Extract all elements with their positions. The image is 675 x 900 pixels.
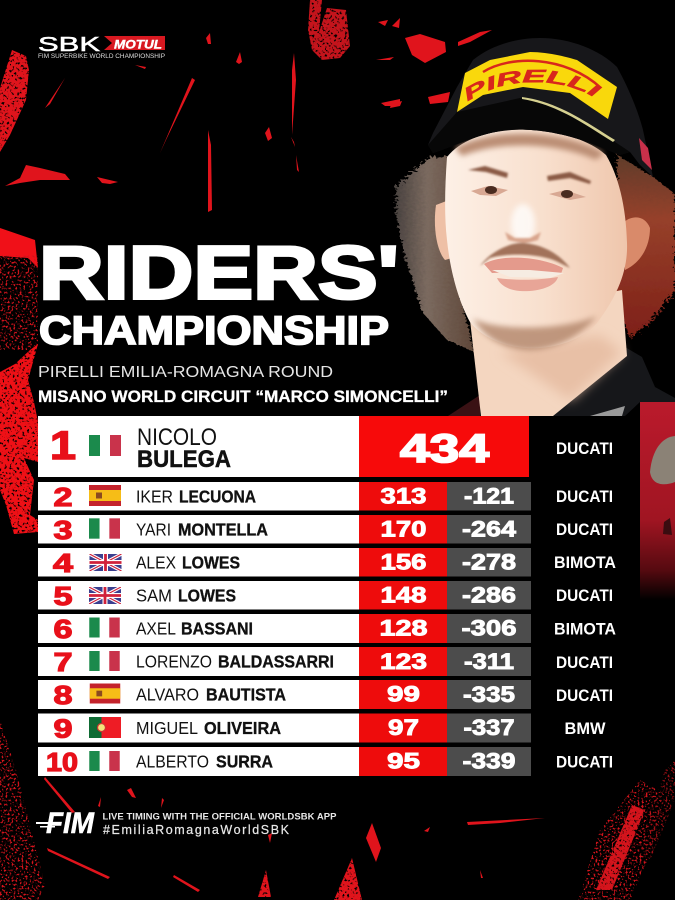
row 8: 8 — [54, 680, 72, 710]
moustache — [480, 243, 570, 268]
red glove at right edge — [640, 400, 675, 600]
row 1: NICOLO — [137, 424, 217, 451]
subtitle: circuit: MISANO WORLD CIRCUIT “MARCO SIMONCELLI” — [38, 388, 448, 406]
row 5: DUCATI — [556, 587, 613, 605]
right hair — [612, 155, 675, 338]
SBK Motul logo: SBK — [38, 34, 101, 56]
row 4: -278 — [462, 550, 516, 574]
row 1 — [38, 416, 613, 477]
row 8: BAUTISTA — [206, 684, 286, 704]
row 7: -311 — [464, 649, 514, 674]
SBK Motul logo: MOTUL — [114, 38, 162, 52]
subtitle: round: PIRELLI EMILIA-ROMAGNA ROUND — [38, 364, 333, 381]
row 10: 10 — [46, 747, 78, 777]
row 2: DUCATI — [556, 488, 613, 506]
row 7: 123 — [380, 649, 427, 674]
body and collar — [448, 347, 675, 416]
SBK Motul logo: FIM SUPERBIKE WORLD CHAMPIONSHIP — [38, 53, 165, 60]
SBK Motul logo — [38, 34, 165, 60]
eyebrows — [468, 166, 591, 184]
FIM logo: FIM — [46, 807, 95, 840]
row 4: 4 — [53, 548, 74, 578]
row 9: 97 — [388, 715, 419, 740]
row 6: -306 — [462, 616, 516, 640]
row 8 — [38, 680, 613, 710]
row 3: 3 — [54, 515, 72, 545]
row 10 — [38, 747, 613, 777]
row 4: 156 — [380, 550, 426, 574]
cap — [428, 38, 653, 176]
row 8: DUCATI — [556, 687, 613, 705]
row 8: ALVARO — [136, 684, 199, 704]
row 5: SAM — [136, 586, 172, 606]
row 1: BULEGA — [137, 446, 231, 473]
row 6: BASSANI — [181, 618, 253, 638]
row 2: 313 — [380, 484, 426, 508]
row 1: 434 — [400, 427, 490, 471]
nose — [505, 204, 541, 244]
row 7: DUCATI — [556, 654, 613, 672]
cap red detail — [639, 138, 652, 170]
row 3: MONTELLA — [178, 520, 268, 540]
chin stubble — [473, 316, 597, 350]
row 10: 95 — [387, 748, 420, 774]
tyre tracks left and right — [0, 720, 675, 900]
mouth — [484, 258, 564, 291]
row 7: 7 — [54, 647, 72, 677]
cap trim — [522, 97, 615, 142]
row 9 — [38, 714, 606, 744]
Pirelli patch — [457, 52, 617, 119]
row 3: 170 — [380, 516, 426, 542]
title: Championship: CHAMPIONSHIP — [39, 309, 389, 353]
neck shadow — [500, 335, 622, 400]
row 1: 1 — [50, 424, 76, 468]
Pirelli logo text: PIRELLI — [466, 70, 602, 102]
row 6 — [38, 614, 616, 644]
row 2: IKER — [136, 486, 173, 506]
row 4: BIMOTA — [554, 554, 616, 572]
row 4: ALEX — [136, 552, 176, 572]
row 5: 5 — [54, 581, 72, 611]
row 3: -264 — [462, 516, 517, 542]
neck — [470, 290, 627, 416]
bottom streaks — [44, 777, 75, 813]
row 9: OLIVEIRA — [204, 718, 281, 738]
row 5 — [38, 581, 613, 611]
row 7: LORENZO — [136, 652, 212, 672]
title: Riders': RIDERS' — [39, 230, 399, 314]
row 9: BMW — [564, 720, 606, 738]
left dark speckled patch — [0, 255, 38, 350]
row 9: MIGUEL — [136, 718, 198, 738]
footer: hashtag: #EmiliaRomagnaWorldSBK — [103, 823, 290, 837]
row 10: -339 — [462, 748, 516, 774]
row 7: BALDASSARRI — [218, 652, 334, 672]
row 9: -337 — [464, 715, 514, 740]
row 10: ALBERTO — [136, 752, 209, 772]
standings table — [38, 416, 640, 777]
row 6: BIMOTA — [554, 620, 616, 638]
row 4: LOWES — [182, 552, 240, 572]
row 2: -121 — [464, 484, 514, 508]
row 4 — [38, 548, 616, 578]
row 6: 128 — [380, 616, 428, 640]
left upper corner paint — [0, 228, 38, 268]
footer: live timing: LIVE TIMING WITH THE OFFICIAL WORLDSBK APP — [102, 812, 337, 822]
row 2: 2 — [54, 482, 72, 512]
row 3: YARI — [136, 520, 171, 540]
row 10: DUCATI — [556, 754, 613, 772]
face — [445, 130, 627, 348]
left lower paint — [0, 344, 38, 534]
row 5: -286 — [462, 582, 516, 608]
rider portrait — [393, 38, 675, 416]
row 7 — [38, 647, 613, 677]
Pirelli arc — [483, 61, 601, 88]
row 1: DUCATI — [556, 440, 613, 458]
row 8: -335 — [463, 682, 515, 707]
row 5: 148 — [380, 582, 426, 608]
left hair — [396, 157, 474, 352]
left ear — [435, 200, 452, 260]
row 5: LOWES — [178, 586, 236, 606]
forehead shadow — [455, 134, 604, 160]
row 3: DUCATI — [556, 521, 613, 539]
row 6: 6 — [54, 614, 72, 644]
row 10: SURRA — [216, 752, 273, 772]
row 9: 9 — [54, 714, 72, 744]
row 3 — [38, 515, 613, 545]
row 2: LECUONA — [179, 486, 256, 506]
row 2 — [38, 482, 613, 512]
eyes — [471, 186, 586, 200]
right ear — [624, 217, 650, 270]
row 6: AXEL — [136, 618, 176, 638]
row 8: 99 — [387, 682, 420, 706]
